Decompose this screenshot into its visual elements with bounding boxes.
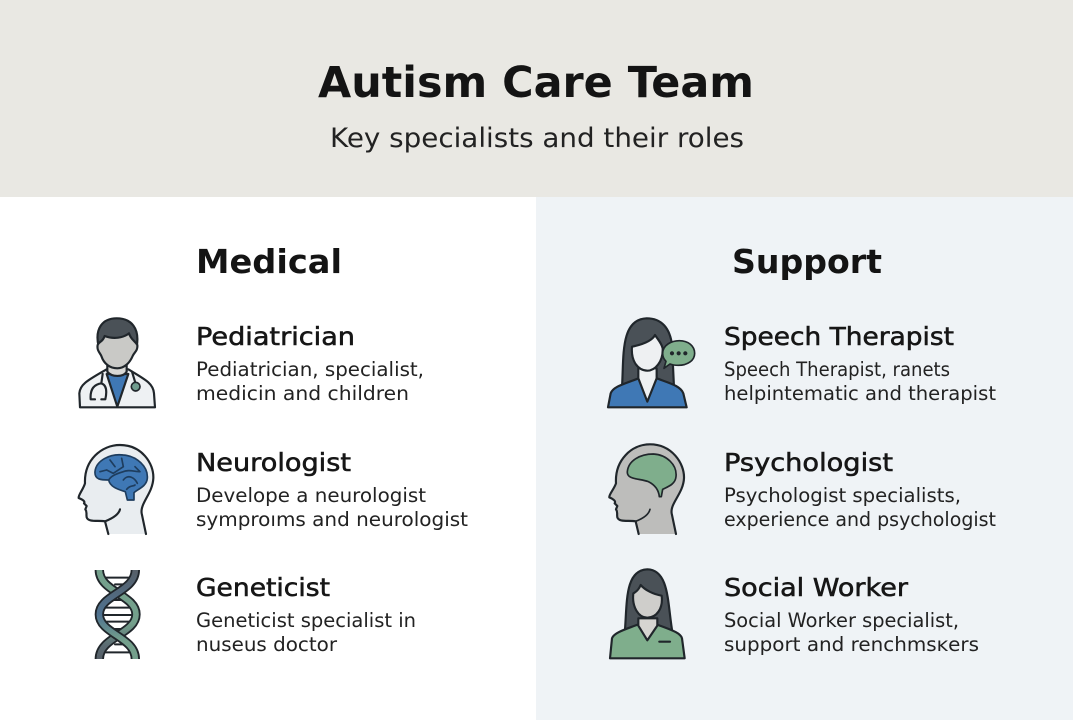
role description (196, 484, 468, 531)
icon: dna helix (99, 570, 136, 659)
subtitle: Key specialists and their roles (330, 123, 744, 154)
role description: nuseus doctor (196, 633, 338, 656)
item: psychologist (609, 444, 996, 534)
role name: Psychologist (724, 448, 893, 477)
role name: Pediatrician (196, 322, 355, 351)
role description: Develope a neurologist (196, 484, 426, 507)
item: pediatrician (79, 318, 424, 407)
role name: Social Worker (724, 573, 909, 602)
role name: Speech Therapist (724, 322, 954, 351)
item: speech therapist (608, 318, 996, 407)
role description (196, 358, 424, 405)
role description: Speech Therapist, ranets (724, 358, 950, 381)
role description: experience and psychologist (724, 508, 996, 531)
role description (724, 609, 979, 656)
role description: support and renchmsĸers (724, 633, 979, 656)
role description (724, 358, 996, 405)
role description: symproıms and neurologist (196, 508, 468, 531)
icon: doctor (79, 318, 155, 407)
item: neurologist (79, 445, 468, 534)
heading: medical: Medical (196, 242, 342, 281)
panel: support (536, 197, 1073, 720)
role description (724, 484, 996, 531)
heading: support: Support (732, 242, 882, 281)
icon: head with blue brain (79, 445, 153, 534)
icon: woman in green scrubs (610, 569, 685, 658)
role description: medicin and children (196, 382, 409, 405)
role description: helpintematic and therapist (724, 382, 996, 405)
item: social worker (610, 569, 979, 658)
icon: woman with speech bubble (608, 318, 695, 407)
role name: Geneticist (196, 573, 330, 602)
role description: Psychologist specialists, (724, 484, 961, 507)
role description (196, 609, 416, 656)
icon: head with green brain (609, 444, 684, 534)
role description: Social Worker specialist, (724, 609, 959, 632)
panel: medical (0, 197, 536, 720)
role description: Pediatrician, specialist, (196, 358, 424, 381)
panel: header band (0, 0, 1073, 197)
role name: Neurologist (196, 448, 351, 477)
role description: Geneticist specialist in (196, 609, 416, 632)
title: Autism Care Team (318, 58, 754, 108)
item: geneticist (99, 570, 416, 659)
